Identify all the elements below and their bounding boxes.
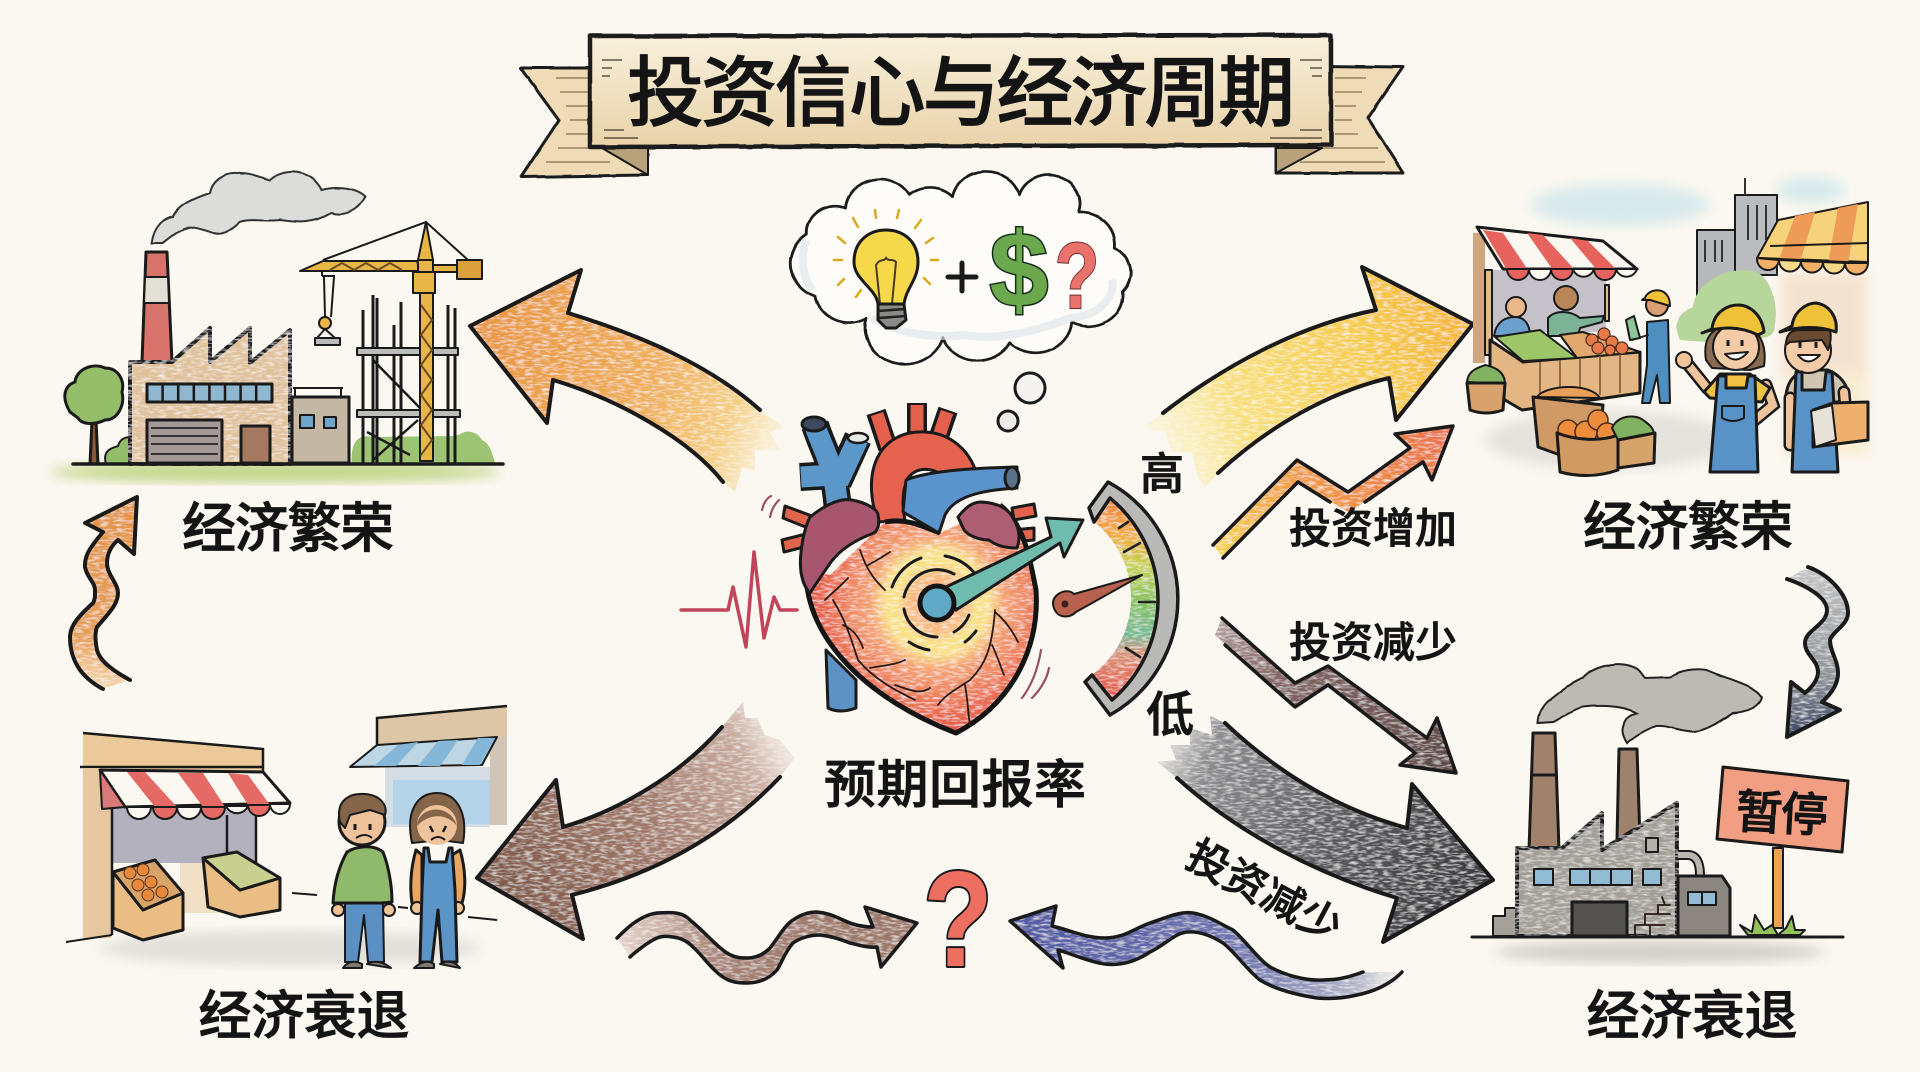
banner left tail — [521, 68, 648, 177]
cloud — [790, 171, 1131, 364]
barrel of oranges — [1557, 410, 1618, 476]
right atrium — [958, 502, 1019, 548]
title banner — [521, 35, 1403, 177]
arrow: investment increases zigzag — [1213, 426, 1453, 558]
left shop wall — [83, 768, 111, 938]
man — [332, 794, 395, 968]
chimney — [142, 252, 172, 362]
superior vena cava — [800, 425, 858, 512]
bulb base — [878, 304, 906, 328]
arrow: big grey decline — [1157, 716, 1493, 942]
icon: light bulb — [834, 210, 938, 328]
bush right — [458, 432, 495, 464]
smoke — [1538, 664, 1762, 743]
scene: boom market with workers — [1467, 176, 1868, 476]
smiling man worker — [1780, 303, 1868, 472]
label: left recession: 经济衰退 — [198, 987, 410, 1046]
pipe — [1678, 855, 1700, 875]
broken bricks — [1635, 897, 1670, 936]
left shop band — [83, 734, 263, 773]
target rings — [892, 556, 976, 650]
garage door — [147, 420, 222, 463]
windows — [1534, 838, 1661, 885]
gauge ticks — [1119, 522, 1155, 657]
street shadow — [100, 930, 480, 966]
banner main panel — [590, 35, 1331, 147]
gauge grey rim — [1085, 482, 1178, 715]
left atrium — [800, 500, 879, 593]
factory building — [130, 328, 290, 464]
inferior vena cava — [826, 650, 856, 711]
arrow: boom to right market — [1143, 267, 1473, 488]
banner right tail — [1276, 66, 1403, 173]
ground line — [73, 462, 503, 466]
grass — [50, 461, 500, 483]
sign text: 暂停 — [1734, 785, 1829, 842]
grass tuft — [1740, 915, 1805, 935]
back chimney — [1617, 749, 1640, 840]
arrow: investment decreases zigzag — [1215, 618, 1456, 773]
right shop — [1757, 202, 1868, 455]
stop sign — [1717, 767, 1848, 935]
label: right recession: 经济衰退 — [1586, 987, 1798, 1046]
annex — [1678, 876, 1730, 936]
vendor left — [1494, 297, 1530, 336]
red stubs — [782, 504, 1036, 552]
arrow: brown wave to question mark — [617, 907, 917, 983]
heart body — [806, 505, 1036, 733]
ECG pulse line — [681, 552, 797, 647]
arrow: boom to left factory — [470, 270, 785, 492]
sky wash — [1530, 176, 1845, 227]
label: left boom: 经济繁荣 — [182, 499, 394, 559]
shop window — [112, 805, 256, 935]
bush — [105, 437, 132, 464]
striped awning — [1477, 227, 1637, 280]
gauge label high: 高 — [1140, 450, 1184, 499]
dark door — [1572, 902, 1627, 936]
label: investment decreases rotated: 投资减少 — [1179, 831, 1349, 952]
motion marks — [762, 496, 1049, 698]
arrow: blue wave to question mark — [1010, 906, 1402, 999]
heart with gauge — [681, 403, 1178, 733]
label: investment increases: 投资增加 — [1289, 505, 1457, 552]
ground strokes — [66, 893, 497, 942]
pointer knob — [920, 586, 954, 620]
sign post — [1773, 848, 1783, 928]
cloud shading — [803, 240, 1113, 337]
door — [241, 426, 270, 463]
factory body — [1517, 803, 1677, 936]
ground shadow — [1485, 410, 1735, 470]
banner folds — [602, 148, 1322, 175]
front chimney — [1529, 733, 1559, 850]
crate of oranges — [113, 860, 183, 940]
plus sign — [948, 263, 976, 291]
vendor right — [1548, 286, 1604, 336]
tree green — [1677, 270, 1776, 342]
gauge needle — [1053, 575, 1142, 616]
waving woman worker — [1676, 305, 1773, 472]
scaffold — [357, 295, 460, 464]
teal pointer arrow — [946, 518, 1083, 610]
ground shadow — [1495, 940, 1825, 964]
central label expected return: 预期回报率 — [824, 757, 1086, 815]
basket left — [1467, 365, 1505, 413]
coronary vessels — [825, 550, 1018, 725]
stall wall and posts — [1473, 233, 1609, 363]
tail hatching — [546, 78, 1385, 162]
ground line — [1472, 936, 1843, 938]
question mark: ? — [1055, 223, 1099, 328]
stall interior — [1488, 270, 1606, 332]
tower crane — [300, 222, 482, 461]
arrow: left wave upward — [70, 497, 137, 689]
crate of oranges — [1533, 387, 1603, 455]
scene: recession factory — [1472, 664, 1848, 964]
title: 投资信心与经济周期 — [627, 51, 1295, 137]
banner corner hatching — [602, 60, 1322, 138]
smoke — [152, 172, 365, 243]
arrow: right wave downward — [1787, 567, 1848, 737]
right shop — [350, 706, 507, 827]
tree — [65, 366, 123, 464]
gauge colour band — [1092, 498, 1158, 700]
bulb rays — [834, 210, 938, 297]
woman — [410, 793, 465, 968]
scene: recession shops with people — [66, 706, 507, 968]
left small tanks — [1493, 908, 1517, 936]
bubble dots — [998, 373, 1045, 431]
red question mark: ? — [923, 843, 993, 995]
dollar sign: $ — [990, 211, 1048, 329]
produce counter — [1490, 328, 1640, 410]
aorta branches — [876, 403, 948, 448]
crate of greens — [203, 852, 280, 917]
crate of greens — [1612, 416, 1655, 468]
thought bubble — [790, 171, 1131, 431]
window strip — [147, 384, 272, 402]
city buildings — [1697, 178, 1777, 300]
small worker — [1626, 290, 1670, 403]
arrow: brown decline to recession — [477, 702, 795, 939]
annex — [292, 388, 349, 463]
aorta arch — [871, 432, 977, 522]
label: right boom: 经济繁荣 — [1583, 498, 1793, 557]
bushes behind scaffold — [352, 434, 495, 464]
label: investment decreases: 投资减少 — [1289, 619, 1457, 666]
bulb glass — [854, 230, 918, 304]
scene: boom factory and crane — [50, 172, 503, 483]
shop awning — [100, 770, 290, 819]
filament — [876, 258, 896, 304]
pulmonary artery — [903, 467, 1017, 533]
gauge label low: 低 — [1146, 689, 1194, 742]
sign board — [1717, 767, 1848, 852]
